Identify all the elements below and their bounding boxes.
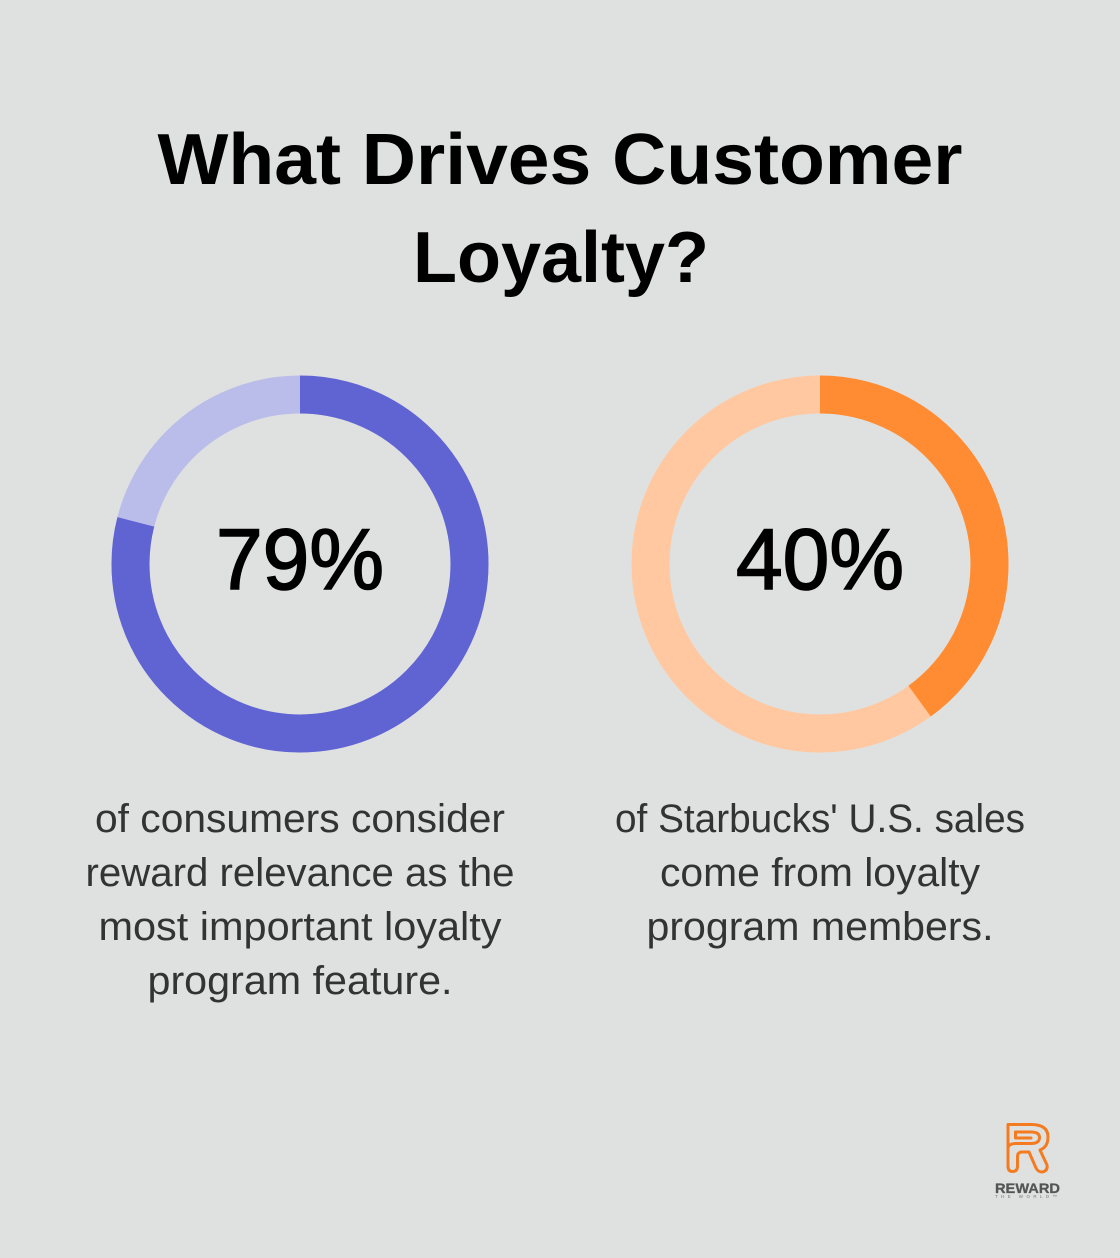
description: 79% — [86, 797, 514, 1003]
title — [158, 120, 962, 298]
panel: 40% stat — [615, 394, 1025, 949]
title: Loyalty? — [413, 218, 709, 298]
description: 79%: reward relevance as the — [86, 851, 514, 895]
panel: 79% stat — [86, 394, 514, 1003]
donut chart: 79% — [130, 394, 470, 734]
logo wordmark: REWARD — [995, 1180, 1060, 1196]
value: 79%: 79% — [216, 512, 384, 608]
logo: Reward the World — [995, 1124, 1060, 1199]
description: 79%: program feature. — [148, 959, 452, 1003]
description: 79%: most important loyalty — [98, 905, 502, 949]
description: 40% — [615, 797, 1025, 949]
description: 40%: come from loyalty — [660, 851, 980, 895]
description: 40%: of Starbucks' U.S. sales — [615, 797, 1025, 841]
logo tagline: THE WORLD™ — [995, 1194, 1060, 1199]
title: What Drives Customer — [158, 120, 962, 200]
donut chart: 40% — [650, 394, 990, 734]
description: 79%: of consumers consider — [95, 797, 505, 841]
icon: R mark — [1008, 1124, 1048, 1172]
value: 40%: 40% — [736, 512, 904, 608]
description: 40%: program members. — [646, 905, 994, 949]
